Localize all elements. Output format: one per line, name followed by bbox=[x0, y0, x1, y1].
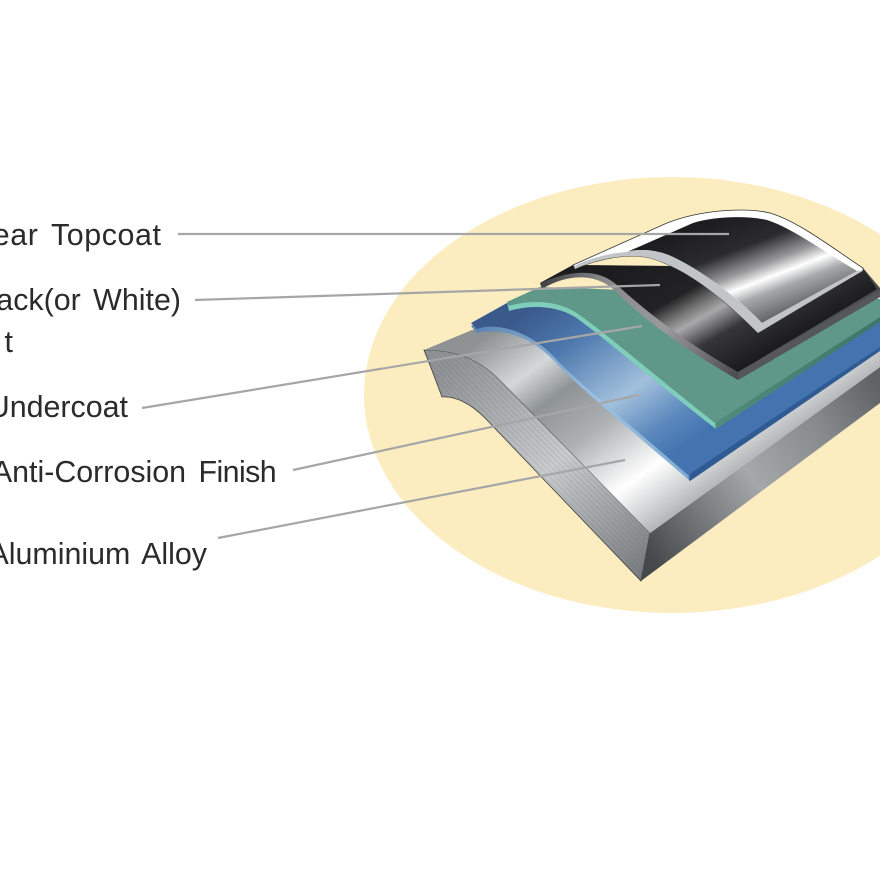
layer: blue anti-corrosion finish bbox=[471, 303, 880, 481]
layer: green undercoat bbox=[507, 287, 880, 429]
leader line: undercoat bbox=[142, 326, 642, 408]
background ellipse bbox=[364, 177, 880, 613]
leader line: aluminium alloy bbox=[218, 460, 625, 538]
layer: clear topcoat bbox=[573, 210, 863, 333]
layer: aluminium alloy bbox=[424, 320, 880, 581]
label: black or white basecoat bbox=[0, 283, 181, 359]
leader line: black or white basecoat bbox=[195, 285, 660, 300]
label: anti-corrosion finish: Anti-Corrosion Finish bbox=[0, 455, 276, 489]
leader line: clear topcoat bbox=[178, 233, 729, 235]
layer: black basecoat bbox=[540, 265, 880, 380]
leader line: anti-corrosion finish bbox=[293, 395, 639, 470]
